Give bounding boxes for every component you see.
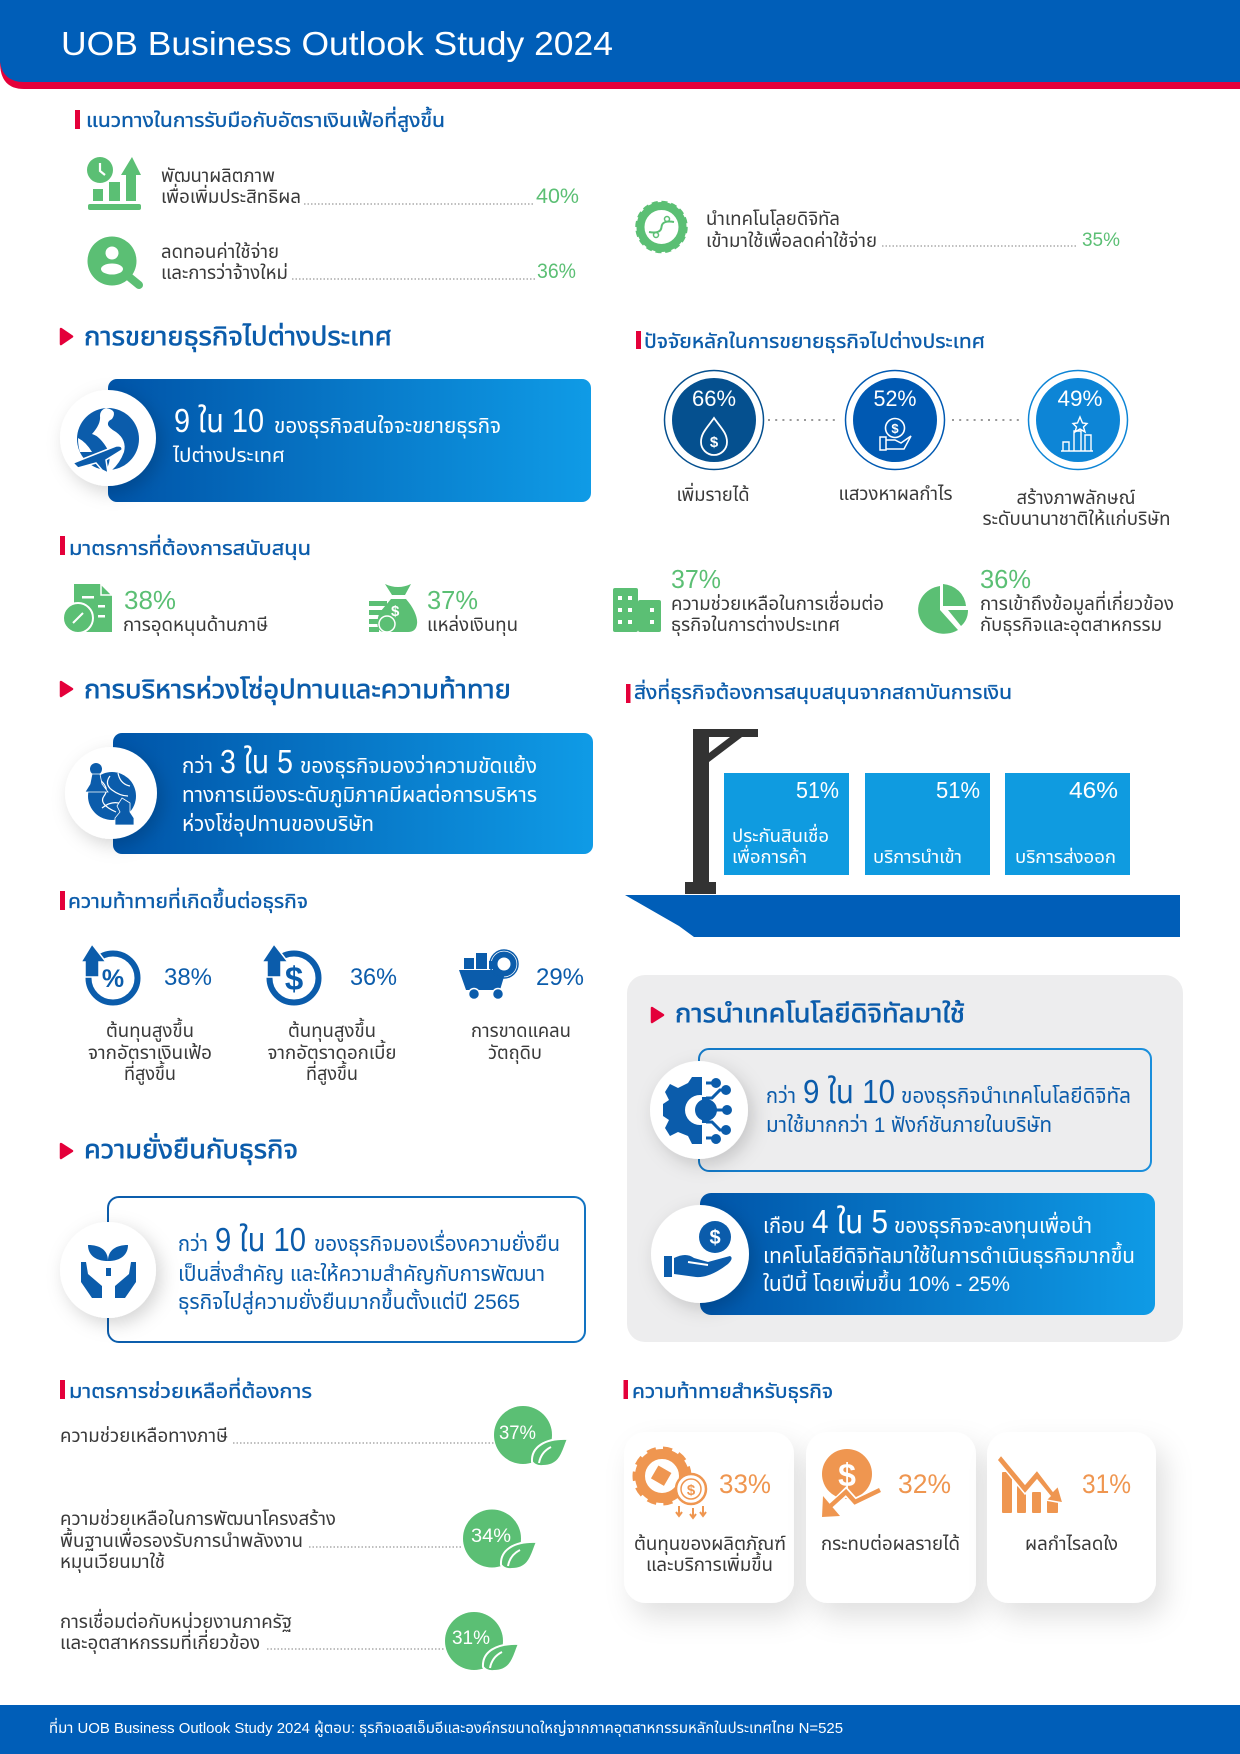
challenge: interest cost 36%: ต้นทุนสูงขึ้น [288, 1017, 376, 1043]
container: import services 51% [865, 773, 990, 875]
callout: 9 in 10 expand overseas: ของธุรกิจสนใจจะขยายธุรกิจ [274, 415, 501, 439]
assistance: government connection 31%: และอุตสาหกรรมที่เกี่ยวข้อง [60, 1629, 260, 1654]
container: trade credit insurance 51%: ประกันสินเชื่อ [732, 823, 829, 846]
icon: money bag: $ [391, 603, 400, 620]
support: tax incentives 38%: 38% [124, 585, 176, 615]
icon: globe with chess pieces [65, 747, 157, 839]
heading: inflation response: แนวทางในการรับมือกับอัตราเงินเฟ้อที่สูงขึ้น [86, 106, 445, 133]
factor: revenue 66%: เพิ่มรายได้ [676, 482, 750, 506]
callout: 3 in 5 geopolitics [65, 733, 593, 854]
support: overseas connection 37%: ความช่วยเหลือในการเชื่อมต่อ [671, 590, 884, 615]
callout: 9 in 10 expand overseas: 9 ใน 10 [174, 402, 264, 439]
card: product cost 33%: 33% [719, 1469, 771, 1499]
assistance: renewable infrastructure 34%: หมุนเวียนมาใช้ [60, 1550, 165, 1573]
icon: digital gear [637, 202, 686, 252]
callout: 9 in 10 use digital: 9 ใน 10 [803, 1073, 895, 1110]
heading: financial institution support: สิ่งที่ธุรกิจต้องการสนุบสนุนจากสถาบันการเงิน [634, 678, 1012, 704]
icon: growth chart and clock [87, 157, 141, 210]
heading: key factors: ปัจจัยหลักในการขยายธุรกิจไปต่างประเทศ [644, 330, 985, 353]
challenge: inflation cost 38%: จากอัตราเงินเฟ้อ [88, 1043, 212, 1064]
support: overseas connection 37%: ธุรกิจในการต่างประเทศ [671, 613, 840, 636]
support: funding 37%: แหล่งเงินทุน [427, 613, 518, 636]
item: cost reduction 36%: และการว่าจ้างใหม่ [161, 261, 288, 284]
support: tax incentives 38%: การอุดหนุนด้านภาษี [123, 613, 268, 636]
heading: assistance needed: มาตรการช่วยเหลือที่ต้องการ [69, 1377, 312, 1403]
icon: gear and coin: $ [687, 1482, 696, 1499]
assistance: tax 37%: 37% [499, 1423, 536, 1444]
icon: hand holding coin: $ [709, 1227, 721, 1249]
assistance: government connection 31% [60, 1608, 519, 1671]
icon: dollar with arrow: $ [285, 960, 303, 997]
item: productivity 40% [87, 157, 579, 210]
container: import services 51%: บริการนำเข้า [873, 847, 962, 867]
callout: 3 in 5 geopolitics: ห่วงโซ่อุปทานของบริษัท [182, 812, 374, 837]
factor: profit 52% [838, 370, 952, 505]
factor: revenue 66%: 66% [692, 386, 736, 411]
support: data access 36%: 36% [980, 564, 1031, 594]
icon: money bag [369, 584, 417, 632]
ship hull [625, 895, 1180, 937]
support: tax incentives 38% [63, 584, 268, 636]
icon: gear circuit [650, 1061, 748, 1159]
challenge: raw material shortage 29%: วัตถุดิบ [488, 1043, 542, 1064]
support: data access 36%: การเข้าถึงข้อมูลที่เกี่ยวข้อง [980, 590, 1174, 616]
icon: buildings [613, 588, 661, 632]
item: productivity 40%: เพื่อเพิ่มประสิทธิผล [161, 183, 301, 208]
ship with containers [625, 729, 1180, 937]
support: overseas connection 37%: 37% [671, 564, 721, 594]
callout: 4 in 5 invest digital: เทคโนโลยีดิจิทัลมาใช้ในการดำเนินธุรกิจมากขึ้น [763, 1241, 1135, 1269]
card: profit decline 31%: 31% [1082, 1469, 1131, 1499]
icon: person search [88, 236, 139, 286]
icon: coin with falling line [822, 1449, 880, 1517]
container: export services 46% [1005, 773, 1130, 875]
assistance: renewable infrastructure 34%: 34% [471, 1526, 511, 1547]
card: product cost 33% [624, 1432, 794, 1603]
callout: 4 in 5 invest digital [651, 1193, 1155, 1315]
heading: support measures: มาตรการที่ต้องการสนับสนุน [69, 534, 311, 560]
callout: 9 in 10 sustainability: ธุรกิจไปสู่ความยั่งยืนมากขึ้นตั้งแต่ปี 2565 [178, 1287, 520, 1315]
factor: brand image 49%: สร้างภาพลักษณ์ [1016, 486, 1136, 509]
factor: profit 52%: แสวงหาผลกำไร [838, 484, 952, 505]
item: digital technology 35% [637, 202, 1120, 252]
item: cost reduction 36%: 36% [537, 260, 576, 283]
connector dots [952, 419, 1022, 421]
challenge: inflation cost 38%: 38% [164, 964, 212, 991]
callout: 9 in 10 sustainability: เป็นสิ่งสำคัญ และให้ความสำคัญกับการพัฒนา [178, 1260, 545, 1286]
support: data access 36%: กับธุรกิจและอุตสาหกรรม [980, 615, 1162, 636]
title: UOB Business Outlook Study 2024 [61, 25, 613, 62]
container: trade credit insurance 51% [724, 773, 849, 875]
container: import services 51%: 51% [936, 777, 980, 803]
challenge: inflation cost 38% [81, 944, 212, 1086]
support: overseas connection 37% [613, 564, 884, 636]
header banner [0, 0, 1240, 89]
callout: 3 in 5 geopolitics: กว่า [182, 754, 213, 778]
callout: 9 in 10 use digital: ของธุรกิจนำเทคโนโลยีดิจิทัล [901, 1085, 1131, 1109]
callout: 4 in 5 invest digital: ของธุรกิจจะลงทุนเพื่อนำ [894, 1211, 1092, 1239]
support: funding 37%: 37% [427, 585, 478, 615]
callout: 9 in 10 sustainability [60, 1197, 585, 1342]
icon: coin in hand: $ [891, 421, 899, 436]
support: funding 37% [369, 584, 518, 636]
icon: percent with arrow: % [102, 965, 124, 993]
challenge: inflation cost 38%: ต้นทุนสูงขึ้น [106, 1017, 194, 1043]
icon: leaf [501, 1542, 537, 1569]
callout: 9 in 10 use digital: กว่า [766, 1084, 796, 1108]
card: revenue impact 32%: 32% [898, 1469, 951, 1499]
callout: 9 in 10 sustainability: ของธุรกิจมองเรื่องความยั่งยืน [314, 1229, 560, 1257]
item: cost reduction 36% [88, 236, 576, 286]
card: product cost 33%: ต้นทุนของผลิตภัณฑ์ [634, 1532, 786, 1555]
callout: 4 in 5 invest digital: 4 ใน 5 [812, 1203, 888, 1240]
icon: leaf [483, 1644, 519, 1671]
icon: tax document [63, 584, 112, 633]
assistance: renewable infrastructure 34%: พื้นฐานเพื่อรองรับการนำพลังงาน [60, 1527, 303, 1552]
icon: pie chart [918, 584, 968, 634]
support: data access 36% [918, 564, 1174, 636]
icon: money drop: $ [710, 434, 719, 451]
heading: supply chain: การบริหารห่วงโซ่อุปทานและความท้าทาย [84, 674, 511, 705]
heading: overseas expansion: การขยายธุรกิจไปต่างประเทศ [84, 321, 392, 352]
icon: hand holding coin [651, 1205, 749, 1303]
factor: brand image 49%: 49% [1058, 386, 1102, 411]
connector dots [768, 419, 839, 421]
challenge: interest cost 36% [262, 944, 397, 1086]
item: productivity 40%: พัฒนาผลิตภาพ [161, 166, 275, 187]
icon: star over bars [1061, 417, 1093, 451]
factor: revenue 66% [664, 370, 764, 506]
callout: 9 in 10 use digital: มาใช้มากกว่า 1 ฟังก์ชันภายในบริษัท [766, 1113, 1052, 1137]
factor: profit 52%: 52% [874, 386, 916, 411]
challenge: raw material shortage 29%: 29% [536, 964, 584, 991]
factor: brand image 49% [982, 370, 1170, 530]
callout: 3 in 5 geopolitics: ทางการเมืองระดับภูมิภาคมีผลต่อการบริหาร [182, 783, 537, 808]
assistance: tax 37% [60, 1406, 568, 1466]
callout: 9 in 10 expand overseas [60, 379, 591, 502]
challenge: interest cost 36%: จากอัตราดอกเบี้ย [268, 1039, 396, 1064]
container: trade credit insurance 51%: 51% [796, 777, 839, 803]
panel: digital technology adoption [627, 975, 1183, 1342]
heading: challenges for business: ความท้าทายสำหรับธุรกิจ [632, 1380, 833, 1403]
challenge: interest cost 36%: ที่สูงขึ้น [306, 1060, 358, 1086]
icon: percent with arrow [81, 944, 138, 1002]
footer [0, 1705, 1240, 1754]
assistance: tax 37%: ความช่วยเหลือทางภาษี [60, 1424, 228, 1447]
challenge: raw material shortage 29%: การขาดแคลน [471, 1021, 571, 1042]
callout: 4 in 5 invest digital: ในปีนี้ โดยเพิ่มขึ้น 10% - 25% [763, 1269, 1010, 1296]
container: export services 46%: บริการส่งออก [1015, 847, 1116, 867]
assistance: government connection 31%: การเชื่อมต่อกับหน่วยงานภาครัฐ [60, 1608, 292, 1633]
factor: brand image 49%: ระดับนานาชาติให้แก่บริษัท [982, 507, 1170, 530]
callout: 4 in 5 invest digital: เกือบ [763, 1215, 805, 1238]
challenge: interest cost 36%: 36% [350, 964, 397, 991]
assistance: government connection 31%: 31% [452, 1628, 490, 1649]
challenge: raw material shortage 29% [459, 950, 584, 1064]
icon: coin with falling line: $ [838, 1457, 856, 1493]
card: revenue impact 32% [806, 1432, 976, 1603]
item: productivity 40%: 40% [536, 185, 579, 208]
card: profit decline 31% [987, 1432, 1156, 1603]
callout: 9 in 10 expand overseas: ไปต่างประเทศ [172, 444, 285, 467]
callout: 3 in 5 geopolitics: 3 ใน 5 [220, 743, 293, 780]
assistance: renewable infrastructure 34% [60, 1507, 537, 1573]
callout: 9 in 10 sustainability: กว่า [178, 1232, 208, 1256]
icon: leaf [532, 1439, 568, 1466]
container: export services 46%: 46% [1069, 777, 1118, 803]
footer: ที่มา UOB Business Outlook Study 2024 ผู้ตอบ: ธุรกิจเอสเอ็มอีและองค์กรขนาดใหญ่จากภาคอุตสาหกรรมหลักในประเทศไทย N=525 [49, 1717, 843, 1737]
item: cost reduction 36%: ลดทอนค่าใช้จ่าย [161, 240, 279, 263]
card: revenue impact 32%: กระทบต่อผลรายได้ [821, 1532, 960, 1555]
item: digital technology 35%: เข้ามาใช้เพื่อลดค่าใช้จ่าย [706, 227, 877, 252]
item: digital technology 35%: 35% [1082, 230, 1120, 251]
callout: 3 in 5 geopolitics: ของธุรกิจมองว่าความขัดแย้ง [300, 754, 537, 779]
icon: gear and coin [635, 1449, 706, 1518]
callout: 9 in 10 use digital [650, 1049, 1151, 1171]
card: product cost 33%: และบริการเพิ่มขึ้น [646, 1551, 773, 1576]
item: digital technology 35%: นำเทคโนโลยดิจิทัล [706, 209, 840, 230]
crane [685, 729, 758, 894]
challenge: inflation cost 38%: ที่สูงขึ้น [124, 1060, 176, 1086]
heading: business challenges: ความท้าทายที่เกิดขึ้นต่อธุรกิจ [68, 887, 308, 913]
icon: dollar with arrow [262, 944, 318, 1002]
card: profit decline 31%: ผลกำไรลดใง [1025, 1534, 1118, 1555]
icon: globe with plane [60, 390, 156, 486]
heading: digital adoption: การนำเทคโนโลยีดิจิทัลมาใช้ [675, 998, 965, 1028]
icon: hands with sprout [60, 1222, 156, 1318]
callout: 9 in 10 sustainability: 9 ใน 10 [215, 1221, 306, 1258]
icon: falling bar chart [997, 1455, 1063, 1513]
heading: sustainability: ความยั่งยืนกับธุรกิจ [84, 1132, 298, 1165]
assistance: renewable infrastructure 34%: ความช่วยเหลือในการพัฒนาโครงสร้าง [60, 1507, 336, 1530]
icon: mine cart and gear [459, 950, 518, 1000]
container: trade credit insurance 51%: เพื่อการค้า [732, 844, 807, 867]
